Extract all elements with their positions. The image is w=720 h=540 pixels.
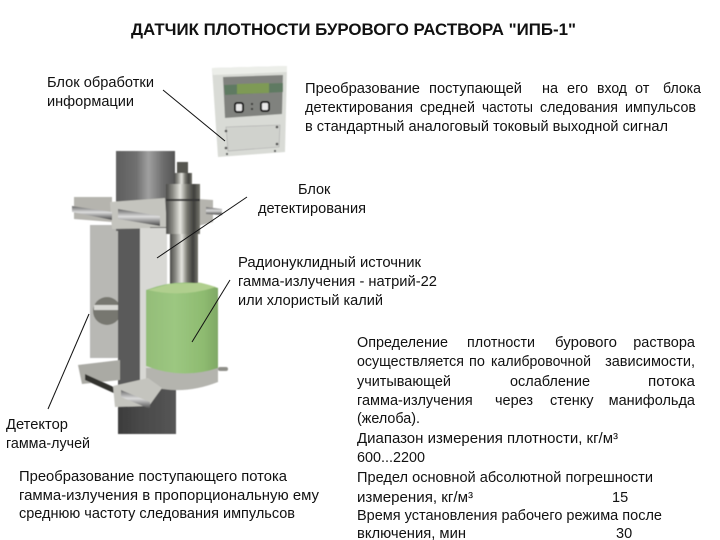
label: description of processing unit: поступающей xyxy=(429,81,522,97)
label: gamma detector: гамма-лучей xyxy=(6,436,90,452)
label: detection unit: детектирования xyxy=(258,201,366,217)
text block: density determination and specs xyxy=(357,335,696,540)
text block: density determination and specs: плотности xyxy=(467,335,535,351)
label: processing unit: Блок обработки xyxy=(47,75,154,91)
text block: density determination and specs: (желоба). xyxy=(357,411,420,427)
label: gamma detector xyxy=(6,417,90,452)
label: description of processing unit: от xyxy=(635,81,650,97)
text block: gamma conversion: среднюю частоту следования импульсов xyxy=(19,506,295,522)
label: description of processing unit: частоты xyxy=(482,100,533,116)
green source housing xyxy=(146,282,228,390)
photo: density sensor assembly xyxy=(72,151,228,434)
text block: density determination and specs: через xyxy=(495,393,533,409)
photo: processing unit device xyxy=(212,66,287,157)
label: detection unit: Блок xyxy=(298,182,331,198)
pipe lower xyxy=(118,385,176,434)
label: description of processing unit: импульсов xyxy=(625,100,696,116)
text block: density determination and specs: Время установления рабочего режима после xyxy=(357,508,662,524)
text block: density determination and specs: Диапазон измерения плотности, кг/м³ xyxy=(357,431,618,447)
label: radionuclide source: Радионуклидный источник xyxy=(238,255,422,271)
light vertical plate xyxy=(140,228,167,386)
text block: density determination and specs: зависимости, xyxy=(605,354,695,370)
label: processing unit: информации xyxy=(47,94,134,110)
upper bracket xyxy=(72,197,222,236)
text block: density determination and specs: 15 xyxy=(612,490,628,506)
label: description of processing unit: его xyxy=(567,81,588,97)
label: processing unit xyxy=(47,75,154,110)
text block: density determination and specs: 600...2200 xyxy=(357,450,425,466)
pipe middle xyxy=(118,225,142,400)
detector box xyxy=(90,225,142,358)
label: radionuclide source: или хлористый калий xyxy=(238,293,383,309)
label: description of processing unit: блока xyxy=(663,81,702,97)
title: ДАТЧИК ПЛОТНОСТИ БУРОВОГО РАСТВОРА "ИПБ-1" xyxy=(131,21,576,39)
text block: density determination and specs: стенку xyxy=(550,393,594,409)
text block: density determination and specs: учитывающей xyxy=(357,374,451,390)
text block: gamma conversion: Преобразование поступающего потока xyxy=(19,469,288,485)
text block: gamma conversion: гамма-излучения в пропорциональную ему xyxy=(19,488,320,504)
text block: density determination and specs: бурового xyxy=(555,335,617,351)
label: radionuclide source xyxy=(238,255,437,309)
text block: density determination and specs: измерения, кг/м³ xyxy=(357,490,473,506)
text block: density determination and specs: ослабление xyxy=(510,374,590,390)
label: detection unit xyxy=(258,182,366,217)
label: description of processing unit: следования xyxy=(540,100,618,116)
detector window xyxy=(93,297,121,325)
text block: density determination and specs: Предел основной абсолютной погрешности xyxy=(357,470,653,486)
detection unit xyxy=(166,162,200,286)
label: description of processing unit: вход xyxy=(597,81,628,97)
label: description of processing unit: Преобразование xyxy=(305,81,420,97)
label: description of processing unit: средней xyxy=(420,100,475,116)
label: description of processing unit: в стандартный аналоговый токовый выходной сигнал xyxy=(305,119,668,135)
text block: density determination and specs: потока xyxy=(648,374,696,390)
text block: density determination and specs: манифольда xyxy=(609,393,696,409)
label: gamma detector: Детектор xyxy=(6,417,68,433)
pointer lines xyxy=(48,90,247,409)
text block: density determination and specs: Определение xyxy=(357,335,448,351)
label: radionuclide source: гамма-излучения - натрий-22 xyxy=(238,274,437,290)
pipe upper xyxy=(116,151,175,231)
label: description of processing unit: детектирования xyxy=(305,100,413,116)
text block: density determination and specs: по xyxy=(469,354,485,370)
text block: density determination and specs: калибровочной xyxy=(491,354,591,370)
text block: density determination and specs: осуществляется xyxy=(357,354,464,370)
text block: density determination and specs: гамма-излучения xyxy=(357,393,473,409)
label: description of processing unit: на xyxy=(542,81,559,97)
text block: density determination and specs: раствора xyxy=(633,335,696,351)
label: description of processing unit xyxy=(305,81,702,135)
text block: gamma conversion xyxy=(19,469,320,522)
lower bracket xyxy=(78,360,162,409)
